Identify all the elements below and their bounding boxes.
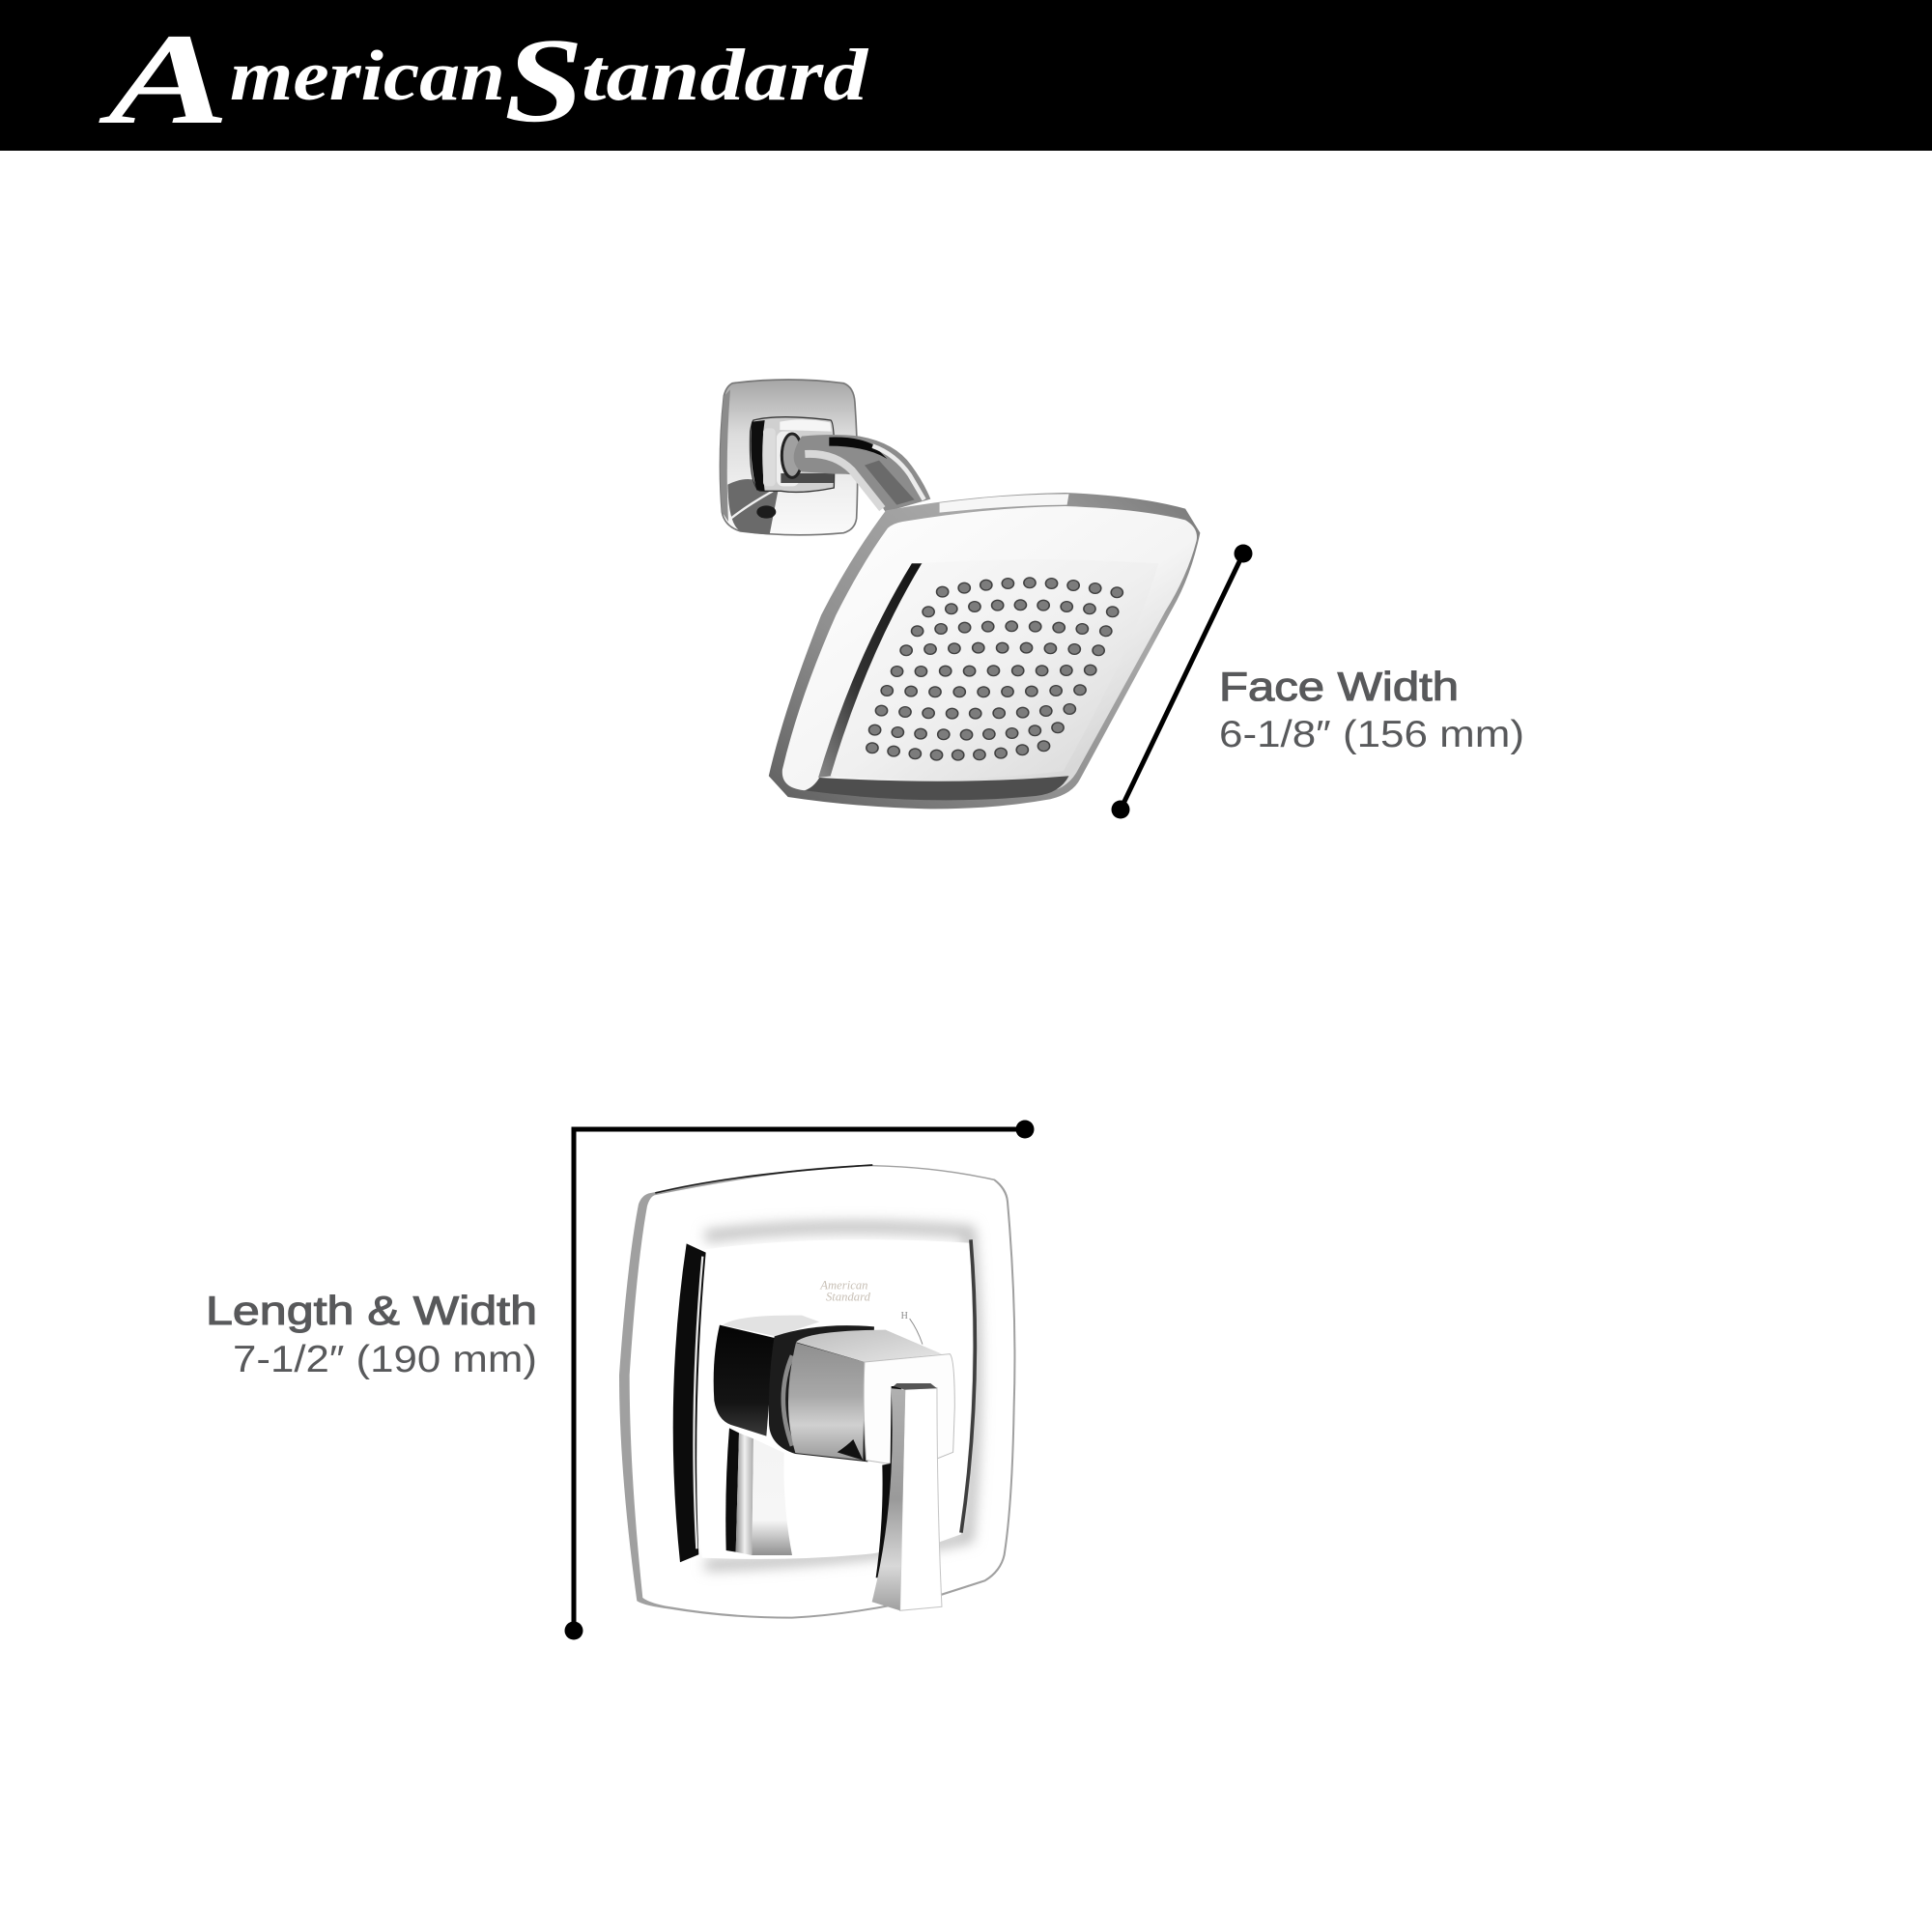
shower head product illustration bbox=[769, 493, 1200, 809]
cube corner reflection bbox=[838, 1439, 863, 1461]
valve trim product illustration bbox=[619, 1165, 1015, 1619]
handle collar bbox=[769, 1325, 874, 1462]
label: face width: Face Width bbox=[1219, 664, 1459, 709]
lever face bbox=[900, 1388, 942, 1610]
shower head rim bbox=[769, 493, 1200, 809]
trim plate rim bbox=[619, 1165, 1015, 1619]
lever side facet bbox=[872, 1388, 905, 1610]
bevel surface bbox=[782, 506, 1197, 797]
label: length and width: 7-1/2″ (190 mm) bbox=[233, 1339, 537, 1380]
lever top edge bbox=[894, 1383, 937, 1390]
trim plate face bbox=[630, 1166, 1013, 1617]
cube side bbox=[788, 1343, 865, 1461]
lever bbox=[872, 1383, 942, 1610]
logo: American Standard bbox=[99, 8, 868, 152]
hot indicator bbox=[901, 1311, 923, 1345]
hot indicator: H bbox=[901, 1311, 908, 1321]
handle body bbox=[714, 1316, 954, 1555]
logo: American Standard: merican bbox=[230, 37, 505, 116]
label: length and width: Length & Width bbox=[206, 1288, 537, 1333]
right groove bbox=[961, 1239, 975, 1533]
dimension bracket: length and width bbox=[564, 1121, 1034, 1640]
wall flange bbox=[720, 380, 858, 535]
shower arm bbox=[794, 435, 930, 512]
logo: American Standard: S bbox=[504, 14, 583, 148]
label: face width bbox=[1219, 664, 1524, 755]
slot highlight bbox=[694, 1257, 702, 1548]
logo: American Standard: tandard bbox=[582, 35, 868, 116]
rim highlight bbox=[940, 494, 1069, 513]
plate bevel shadow bbox=[705, 1227, 976, 1565]
label: face width: 6-1/8″ (156 mm) bbox=[1219, 714, 1524, 755]
bottom dark band bbox=[805, 776, 1069, 800]
label: length and width bbox=[206, 1288, 537, 1380]
dimension line: face width bbox=[1111, 545, 1252, 819]
face plate bbox=[831, 559, 1158, 779]
wall flange and shower arm bbox=[720, 380, 930, 535]
header bar bbox=[0, 0, 1932, 152]
handle rear block top bbox=[723, 1316, 819, 1336]
handle stem bbox=[725, 1428, 792, 1555]
left dark slot bbox=[818, 563, 923, 778]
cube top bbox=[796, 1330, 942, 1362]
top rim edge bbox=[655, 1165, 872, 1193]
plate logo text: American bbox=[819, 1279, 868, 1293]
collar ring bbox=[783, 1355, 792, 1446]
cube front bbox=[864, 1354, 954, 1463]
left slot bbox=[673, 1243, 706, 1562]
plate logo text: Standard bbox=[826, 1291, 871, 1304]
recessed plate bbox=[699, 1239, 973, 1559]
handle rear block bbox=[714, 1325, 775, 1436]
spray nozzles bbox=[867, 578, 1122, 760]
plate logo text bbox=[819, 1279, 871, 1304]
lever shadow bbox=[876, 1386, 901, 1577]
logo: American Standard: A bbox=[99, 8, 230, 152]
